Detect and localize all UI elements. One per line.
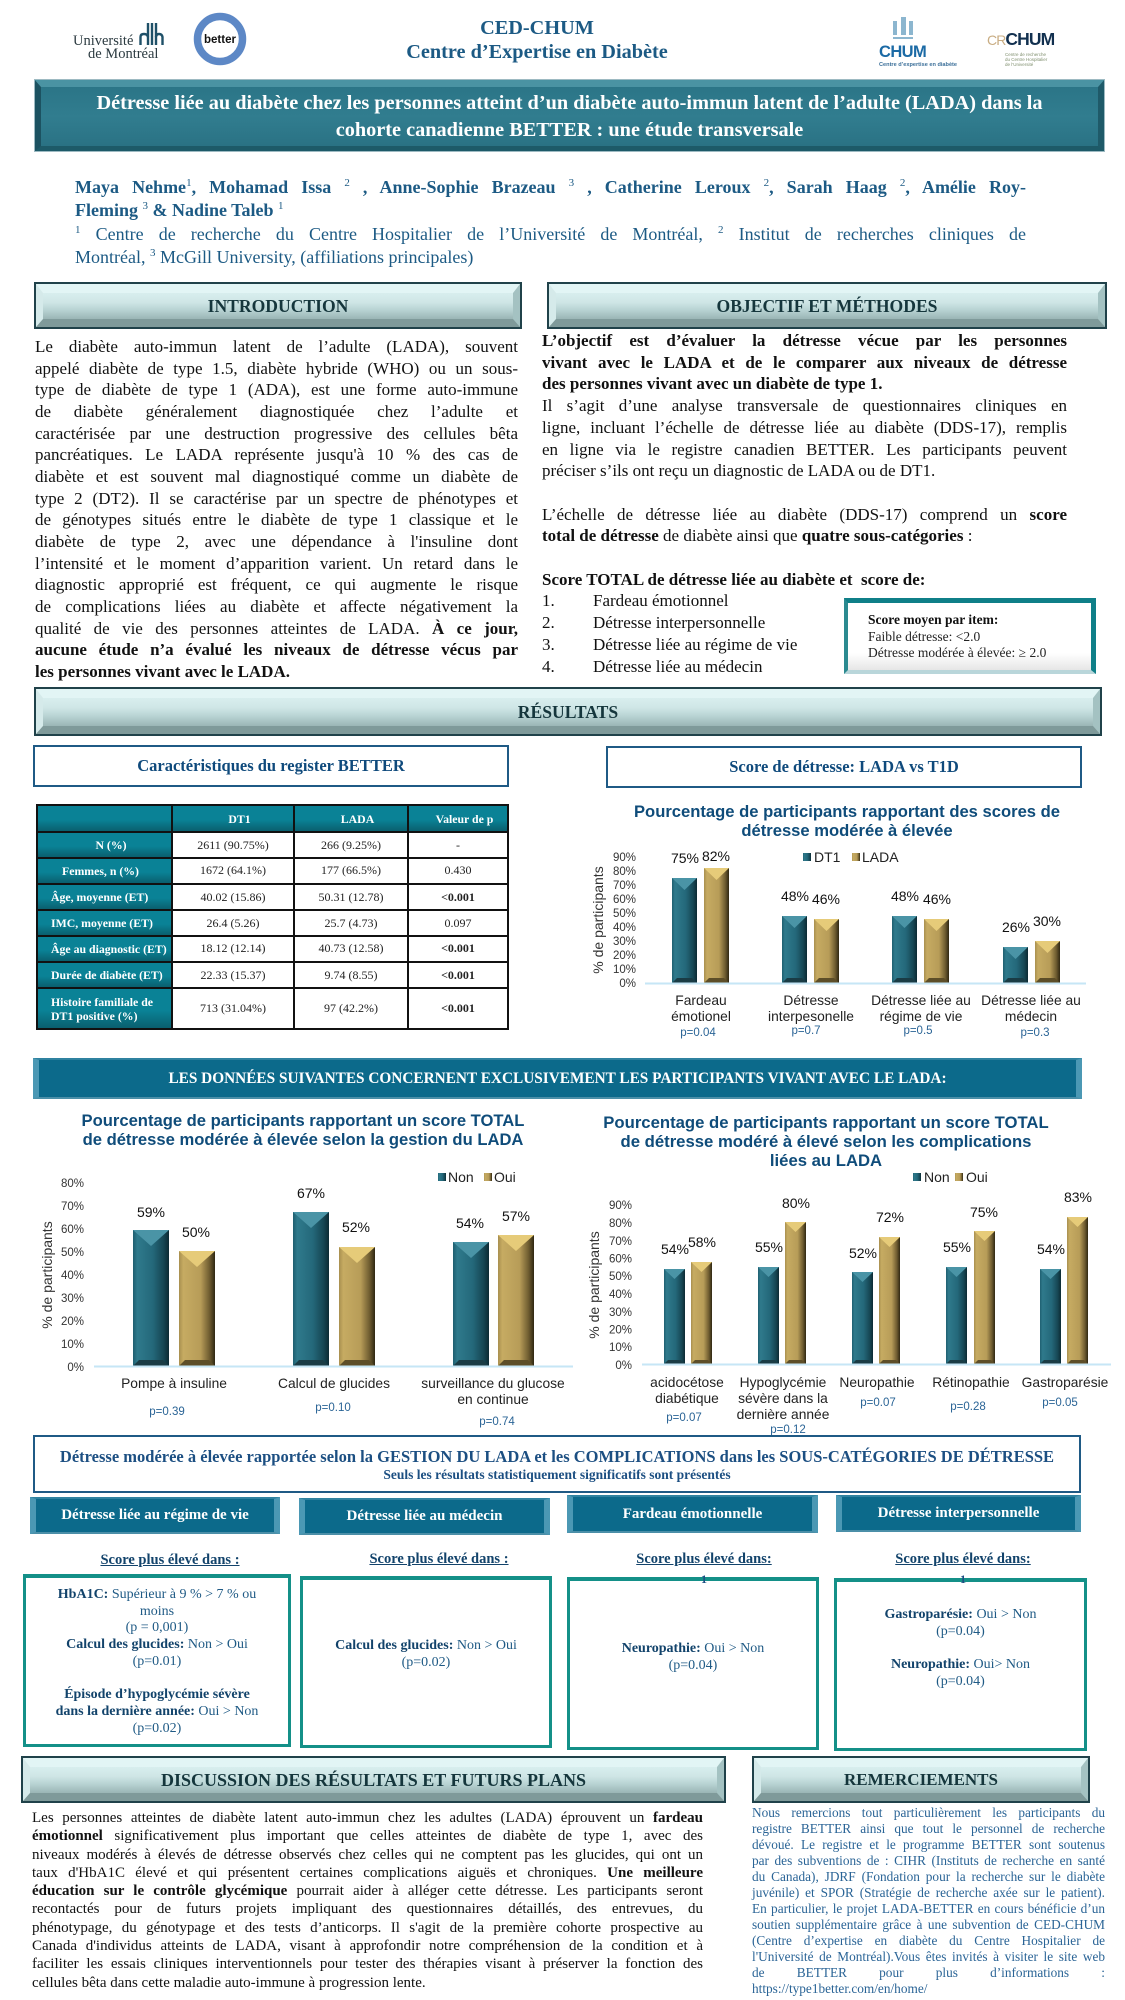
category labels: Hypoglycémie bbox=[740, 1375, 827, 1390]
text: discussion: niveaux modérés à élevés de détresse observés chez celles qui ne comptent pas les glucides, qui ont un bbox=[32, 1847, 703, 1863]
value labels: 58% bbox=[688, 1234, 716, 1250]
table: caractéristiques du registre: Durée de diabète (ET) bbox=[51, 968, 163, 982]
bars bbox=[645, 868, 1086, 984]
header: CED-CHUM: CED-CHUM bbox=[480, 17, 594, 39]
panel: résultats régime de vie bbox=[23, 1574, 291, 1747]
table: caractéristiques du registre: <0.001 bbox=[441, 1001, 475, 1015]
table: caractéristiques du registre: IMC, moyenne (ET) bbox=[51, 916, 153, 930]
table: caractéristiques du registre: Valeur de p bbox=[436, 812, 493, 826]
logo: Université de Montréal bbox=[73, 23, 164, 62]
table: caractéristiques du registre: <0.001 bbox=[441, 890, 475, 904]
legend bbox=[803, 849, 899, 865]
value labels: 75% bbox=[671, 850, 699, 866]
table: caractéristiques du registre: Histoire familiale de bbox=[51, 995, 153, 1009]
text: discussion: Canada d'individus atteints de LADA, visant à approfondir notre compréhension de la condition et à bbox=[32, 1938, 703, 1954]
panel: résultats fardeau émotionnelle: Neuropathie: Oui > Non bbox=[622, 1641, 764, 1656]
table: caractéristiques du registre: Âge au diagnostic (ET) bbox=[51, 942, 167, 956]
box note: Seuls les résultats statistiquement significatifs sont présentés bbox=[383, 1467, 731, 1482]
marker col 3: 1 bbox=[701, 1572, 707, 1586]
legend: Oui bbox=[966, 1169, 988, 1185]
bars bbox=[642, 1217, 1111, 1366]
text: objectif et méthodes: Détresse interpersonnelle bbox=[593, 613, 765, 632]
text: introduction: les personnes vivant avec le LADA. bbox=[35, 662, 290, 681]
y axis: 10% bbox=[613, 964, 636, 976]
table: caractéristiques du registre: <0.001 bbox=[441, 968, 475, 982]
p values: p=0.28 bbox=[950, 1401, 986, 1413]
category labels: médecin bbox=[1005, 1009, 1057, 1024]
subheading: score de détresse: Score de détresse: LADA vs T1D bbox=[729, 757, 959, 776]
legend: Non bbox=[448, 1169, 474, 1185]
logo: BETTER bbox=[194, 12, 246, 66]
value labels: 83% bbox=[1064, 1189, 1092, 1205]
y axis: % de participants bbox=[590, 866, 606, 974]
value labels: 50% bbox=[182, 1224, 210, 1240]
chart title: de détresse modéré à élevé selon les complications bbox=[621, 1132, 1031, 1151]
panel: résultats régime de vie: moins bbox=[140, 1604, 174, 1619]
category labels: interpesonelle bbox=[768, 1009, 854, 1024]
callout: score moyen par item: Score moyen par item: bbox=[868, 612, 998, 627]
p values: p=0.74 bbox=[479, 1416, 515, 1428]
text: introduction: diagnostic approprié est fréquent, ce qui augmente le risque bbox=[35, 575, 518, 594]
category labels: acidocétose bbox=[650, 1375, 724, 1390]
chart title bbox=[634, 802, 1060, 840]
logo: CHUM bbox=[879, 17, 957, 68]
legend: Non bbox=[924, 1169, 950, 1185]
p values: p=0.04 bbox=[680, 1027, 716, 1039]
table: caractéristiques du registre: 22.33 (15.37) bbox=[200, 968, 266, 982]
text: discussion bbox=[32, 1810, 703, 1991]
y axis: 30% bbox=[61, 1293, 84, 1305]
panel: résultats interpersonnelle: (p=0.04) bbox=[936, 1674, 985, 1689]
value labels: 46% bbox=[812, 891, 840, 907]
text: introduction: aucune étude n’a évalué les niveaux de détresse vécus par bbox=[35, 640, 518, 659]
authors and affiliations: Fleming 3 & Nadine Taleb 1 bbox=[75, 200, 284, 220]
category labels: Détresse liée au bbox=[871, 993, 971, 1008]
value labels: 67% bbox=[297, 1185, 325, 1201]
value labels: 57% bbox=[502, 1208, 530, 1224]
text: objectif et méthodes: Détresse liée au médecin bbox=[593, 657, 762, 676]
value labels: 54% bbox=[661, 1241, 689, 1257]
box heading: Détresse modérée à élevée rapportée selon la GESTION DU LADA et les COMPLICATIONS dans les SOUS-CATÉGORIES DE DÉTRESSE bbox=[60, 1447, 1054, 1466]
panel: résultats régime de vie: HbA1C: Supérieur à 9 % > 7 % ou bbox=[58, 1587, 256, 1602]
y axis bbox=[586, 1200, 632, 1372]
table: caractéristiques du registre: 18.12 (12.14) bbox=[200, 941, 266, 955]
text: remerciements: En particulier, le projet LADA-BETTER en cours bénéficie d’un bbox=[752, 1901, 1105, 1916]
authors and affiliations: Maya Nehme1, Mohamad Issa 2 , Anne-Sophie Brazeau 3 , Catherine Leroux 2, Sarah Haag 2, Amélie Roy- bbox=[75, 177, 1026, 197]
text: remerciements: registre BETTER ainsi que tout le personnel de recherche bbox=[752, 1821, 1105, 1836]
table: caractéristiques du registre: Âge, moyenne (ET) bbox=[51, 890, 148, 904]
legend bbox=[913, 1169, 988, 1185]
y axis: 10% bbox=[609, 1342, 632, 1354]
logo: CRCHUM bbox=[987, 29, 1054, 67]
value labels: 82% bbox=[702, 848, 730, 864]
value labels bbox=[661, 1189, 1092, 1261]
text: objectif et méthodes: préciser s’ils ont reçu un diagnostic de LADA ou de DT1. bbox=[542, 461, 935, 480]
p values: p=0.10 bbox=[315, 1402, 351, 1414]
value labels: 48% bbox=[781, 888, 809, 904]
category labels bbox=[671, 993, 1081, 1024]
text: remerciements: du Canada), JDRF (Fondation pour la recherche sur le diabète bbox=[752, 1869, 1105, 1884]
table: caractéristiques du registre: 40.73 (12.58) bbox=[318, 941, 384, 955]
p values: p=0.5 bbox=[903, 1025, 933, 1037]
table: caractéristiques du registre: 2611 (90.75%) bbox=[197, 838, 269, 852]
authors and affiliations: Montréal, 3 McGill University, (affiliations principales) bbox=[75, 247, 473, 267]
subheading: caractéristiques bbox=[33, 745, 509, 787]
title banner: cohorte canadienne BETTER : une étude transversale bbox=[336, 119, 803, 141]
logo: BETTER: better bbox=[204, 34, 236, 46]
y axis: 60% bbox=[609, 1254, 632, 1266]
p values: p=0.12 bbox=[770, 1424, 806, 1436]
y axis: 90% bbox=[609, 1200, 632, 1212]
subheading: score col 2: Score plus élevé dans : bbox=[369, 1551, 509, 1567]
value labels: 52% bbox=[849, 1245, 877, 1261]
text: introduction: Le diabète auto-immun latent de l’adulte (LADA), souvent bbox=[35, 337, 518, 356]
y axis: 70% bbox=[61, 1201, 84, 1213]
value labels: 54% bbox=[456, 1215, 484, 1231]
y axis: 50% bbox=[613, 908, 636, 920]
y axis: 40% bbox=[613, 922, 636, 934]
panel: résultats régime de vie: Calcul des glucides: Non > Oui bbox=[66, 1637, 248, 1652]
text: discussion: faciliter les essais cliniques interventionnels pour tester des thérapies visant à préserver la fonction des bbox=[32, 1956, 703, 1972]
text: introduction: pancréatiques. Le LADA représente jusqu'à 10 % des cas de bbox=[35, 445, 518, 464]
chart: scores LADA vs DT1 bbox=[590, 802, 1086, 1039]
heading: introduction bbox=[36, 284, 520, 327]
header: CED-CHUM bbox=[406, 17, 668, 63]
subheading: score col 1: Score plus élevé dans : bbox=[100, 1552, 240, 1568]
y axis bbox=[39, 1178, 84, 1374]
text: remerciements bbox=[752, 1805, 1105, 1996]
chart: gestion du LADA bbox=[39, 1111, 573, 1428]
text: objectif et méthodes: ligne, incluant l’échelle de détresse liée au diabète (DDS-17), remplis bbox=[542, 418, 1067, 437]
text: objectif et méthodes bbox=[542, 331, 1067, 676]
category labels: en continue bbox=[457, 1392, 529, 1407]
panel: résultats médecin: (p=0.02) bbox=[402, 1655, 450, 1670]
logo: CRCHUM: de l’Université bbox=[1005, 62, 1033, 67]
tab: fardeau émotionnelle bbox=[567, 1495, 818, 1533]
p values: p=0.39 bbox=[149, 1406, 185, 1418]
y axis: 0% bbox=[615, 1360, 632, 1372]
category labels: Détresse liée au bbox=[981, 993, 1081, 1008]
value labels: 54% bbox=[1037, 1241, 1065, 1257]
table: caractéristiques du registre: - bbox=[456, 838, 460, 852]
heading: introduction: INTRODUCTION bbox=[208, 296, 348, 316]
category labels: émotionel bbox=[671, 1009, 731, 1024]
table: caractéristiques du registre: 1672 (64.1%) bbox=[200, 863, 266, 877]
heading: discussion: DISCUSSION DES RÉSULTATS ET FUTURS PLANS bbox=[161, 1770, 586, 1790]
y axis: 50% bbox=[609, 1271, 632, 1283]
bars bbox=[94, 1212, 573, 1368]
y axis: 40% bbox=[61, 1270, 84, 1282]
text: objectif et méthodes: Il s’agit d’une analyse transversale de questionnaires cliniques en bbox=[542, 396, 1067, 415]
category labels: Détresse bbox=[783, 993, 839, 1008]
text: remerciements: de BETTER pour plus d’informations : bbox=[752, 1965, 1105, 1980]
y axis: 50% bbox=[61, 1247, 84, 1259]
y axis: % de participants bbox=[586, 1231, 602, 1339]
subheading: caractéristiques: Caractéristiques du register BETTER bbox=[137, 756, 405, 775]
legend: Oui bbox=[494, 1169, 516, 1185]
table: caractéristiques du registre: 9.74 (8.55) bbox=[324, 968, 378, 982]
subheading: score col 4: Score plus élevé dans: bbox=[895, 1551, 1031, 1567]
chart title: Pourcentage de participants rapportant un score TOTAL bbox=[82, 1111, 524, 1130]
p values: p=0.05 bbox=[1042, 1397, 1078, 1409]
category labels: Gastroparésie bbox=[1022, 1375, 1109, 1390]
chart title: détresse modérée à élevée bbox=[741, 821, 953, 840]
text: remerciements: Nous remercions tout particulièrement les participants du bbox=[752, 1805, 1105, 1820]
chart title bbox=[603, 1113, 1049, 1170]
panel: résultats interpersonnelle: Neuropathie: Oui> Non bbox=[891, 1657, 1030, 1672]
authors and affiliations bbox=[75, 177, 1026, 267]
legend: DT1 bbox=[814, 849, 841, 865]
heading: résultats bbox=[36, 689, 1100, 734]
panel: résultats régime de vie: (p = 0,001) bbox=[126, 1620, 188, 1635]
chart title: Pourcentage de participants rapportant un score TOTAL bbox=[603, 1113, 1049, 1132]
text: discussion: Les personnes atteintes de diabète latent auto-immun chez les adultes (LADA) éprouvent un fardeau bbox=[32, 1810, 703, 1826]
logo: CRCHUM: CRCHUM bbox=[987, 29, 1054, 49]
p values: p=0.07 bbox=[666, 1412, 702, 1424]
p values bbox=[666, 1397, 1078, 1436]
text: discussion: cellules bêta dans cette maladie auto-immune à progression lente. bbox=[32, 1975, 426, 1991]
text: objectif et méthodes: 4. bbox=[542, 657, 555, 676]
panel: résultats médecin bbox=[300, 1576, 552, 1748]
header: CED-CHUM: Centre d’Expertise en Diabète bbox=[406, 41, 668, 63]
text: remerciements: soutien supplémentaire grâce à une subvention de CED-CHUM bbox=[752, 1917, 1105, 1932]
text: remerciements: l'Université de Montréal).Vous êtes invités à visiter le site web bbox=[752, 1949, 1105, 1964]
chart title: liées au LADA bbox=[770, 1151, 882, 1170]
text: introduction: de complications liées au diabète et affecte négativement la bbox=[35, 597, 518, 616]
text: objectif et méthodes: 2. bbox=[542, 613, 555, 632]
logo: CRCHUM: Centre de recherche bbox=[1005, 52, 1046, 57]
text: objectif et méthodes: total de détresse de diabète ainsi que quatre sous-catégories : bbox=[542, 526, 972, 545]
category labels: Pompe à insuline bbox=[121, 1376, 227, 1391]
text: discussion: recontactés pour de futurs projets impliquant des questionnaires détaillés, des entrevues, du bbox=[32, 1901, 703, 1917]
y axis: 70% bbox=[613, 880, 636, 892]
chart title: de détresse modérée à élevée selon la gestion du LADA bbox=[83, 1130, 523, 1149]
table: caractéristiques du registre: 97 (42.2%) bbox=[324, 1001, 378, 1015]
category labels: sévère dans la bbox=[738, 1391, 828, 1406]
table: caractéristiques du registre: 0.430 bbox=[444, 863, 472, 877]
p values: p=0.07 bbox=[860, 1397, 896, 1409]
text: introduction: l’intensité et le moment d’apparition varient. Un retard dans le bbox=[35, 554, 518, 573]
heading: objectif et méthodes bbox=[549, 284, 1105, 327]
text: discussion: phénotypage, du génotypage et des tests d’anticorps. Il s'agit de la première cohorte prospective au bbox=[32, 1920, 703, 1936]
table: caractéristiques du registre: 0.097 bbox=[444, 916, 472, 930]
tab: régime de vie: Détresse liée au régime de vie bbox=[61, 1507, 249, 1523]
value labels: 55% bbox=[943, 1239, 971, 1255]
text: objectif et méthodes: en ligne via le registre canadien BETTER. Les participants peuvent bbox=[542, 440, 1067, 459]
heading: remerciements: REMERCIEMENTS bbox=[844, 1770, 998, 1789]
table: caractéristiques du registre: 25.7 (4.73) bbox=[324, 916, 378, 930]
callout: score moyen par item: Détresse modérée à élevée: ≥ 2.0 bbox=[868, 645, 1046, 660]
value labels: 46% bbox=[923, 891, 951, 907]
panel: résultats fardeau émotionnelle: (p=0.04) bbox=[669, 1658, 717, 1673]
text: remerciements: (Centre d’expertise en diabète du Centre Hospitalier de bbox=[752, 1933, 1105, 1948]
text: remerciements: par des subventions de : CIHR (Instituts de recherche en santé bbox=[752, 1853, 1105, 1868]
text: introduction: diabète de type 2, avec une dépendance à l'insuline dont bbox=[35, 532, 518, 551]
value labels: 80% bbox=[782, 1195, 810, 1211]
heading: résultats: RÉSULTATS bbox=[518, 702, 618, 722]
p values: p=0.7 bbox=[791, 1025, 821, 1037]
value labels: 30% bbox=[1033, 913, 1061, 929]
authors and affiliations: 1 Centre de recherche du Centre Hospitalier de l’Université de Montréal, 2 Institut de recherches cliniques de bbox=[75, 224, 1026, 244]
y axis: 0% bbox=[67, 1362, 84, 1374]
text: introduction: diabète et est souvent mal diagnostiqué comme un diabète de bbox=[35, 467, 518, 486]
y axis: 80% bbox=[609, 1218, 632, 1230]
table: caractéristiques du registre: <0.001 bbox=[441, 941, 475, 955]
p values bbox=[149, 1402, 515, 1428]
value labels: 48% bbox=[891, 888, 919, 904]
heading: objectif et méthodes: OBJECTIF ET MÉTHODES bbox=[717, 296, 937, 316]
text: discussion: émotionnel significativement plus important que celles atteintes de diabète de type 1, avec des bbox=[32, 1828, 703, 1844]
text: objectif et méthodes: Score TOTAL de détresse liée au diabète et score de: bbox=[542, 570, 925, 589]
table: caractéristiques du registre: Femmes, n (%) bbox=[62, 864, 139, 878]
panel: résultats interpersonnelle bbox=[834, 1578, 1087, 1751]
tab: fardeau émotionnelle: Fardeau émotionnelle bbox=[623, 1506, 762, 1522]
value labels: 75% bbox=[970, 1204, 998, 1220]
y axis: % de participants bbox=[39, 1221, 55, 1329]
title banner bbox=[34, 79, 1105, 152]
value labels: 59% bbox=[137, 1204, 165, 1220]
category labels: surveillance du glucose bbox=[421, 1376, 565, 1391]
y axis: 30% bbox=[609, 1307, 632, 1319]
text: objectif et méthodes: Détresse liée au régime de vie bbox=[593, 635, 797, 654]
y axis: 30% bbox=[613, 936, 636, 948]
value labels: 72% bbox=[876, 1209, 904, 1225]
y axis: 80% bbox=[613, 866, 636, 878]
y axis: 60% bbox=[61, 1224, 84, 1236]
legend bbox=[438, 1169, 516, 1185]
title banner: Détresse liée au diabète chez les personnes atteint d’un diabète auto-immun latent de l’adulte (LADA) dans la bbox=[96, 92, 1043, 114]
subheading: score de détresse bbox=[606, 746, 1082, 788]
p values bbox=[680, 1025, 1050, 1039]
text: objectif et méthodes: des personnes vivant avec un diabète de type 1. bbox=[542, 374, 882, 393]
table: caractéristiques du registre: 177 (66.5%) bbox=[321, 863, 381, 877]
text: objectif et méthodes: vivant avec le LADA et de le comparer aux niveaux de détresse bbox=[542, 353, 1067, 372]
chart title bbox=[82, 1111, 524, 1149]
y axis: 70% bbox=[609, 1236, 632, 1248]
text: objectif et méthodes: L’échelle de détresse liée au diabète (DDS-17) comprend un score bbox=[542, 505, 1067, 524]
legend: LADA bbox=[862, 849, 899, 865]
banner: données LADA bbox=[33, 1058, 1082, 1099]
y axis: 90% bbox=[613, 852, 636, 864]
text: introduction: type de diabète de type 1 (ADA), est une forme auto-immune bbox=[35, 380, 518, 399]
table: caractéristiques du registre: LADA bbox=[341, 812, 374, 826]
marker col 4: 1 bbox=[960, 1572, 966, 1586]
logo: CHUM: CHUM bbox=[879, 43, 926, 61]
panel: résultats régime de vie: Épisode d’hypoglycémie sévère bbox=[64, 1687, 250, 1702]
y axis: 40% bbox=[609, 1289, 632, 1301]
text: introduction: de génotypes situés entre le diabète de type 1 classique et le bbox=[35, 510, 518, 529]
table: caractéristiques du registre: DT1 positive (%) bbox=[51, 1009, 138, 1023]
tab: interpersonnelle: Détresse interpersonnelle bbox=[878, 1505, 1039, 1521]
callout: score moyen par item bbox=[844, 598, 1096, 674]
table: caractéristiques du registre: 40.02 (15.86) bbox=[200, 890, 266, 904]
heading: remerciements bbox=[754, 1758, 1088, 1801]
chart: complications du LADA bbox=[586, 1113, 1111, 1436]
table: caractéristiques du registre: 26.4 (5.26) bbox=[206, 916, 260, 930]
table: caractéristiques du registre bbox=[36, 804, 509, 1030]
text: objectif et méthodes: 3. bbox=[542, 635, 555, 654]
panel: résultats fardeau émotionnelle bbox=[567, 1577, 819, 1750]
text: introduction: caractérisée par une destruction progressive des cellules bêta bbox=[35, 424, 518, 443]
text: objectif et méthodes: 1. bbox=[542, 591, 555, 610]
logo: CRCHUM: du Centre Hospitalier bbox=[1005, 57, 1047, 62]
p values: p=0.3 bbox=[1020, 1027, 1050, 1039]
category labels: Calcul de glucides bbox=[278, 1376, 390, 1391]
category labels: Rétinopathie bbox=[932, 1375, 1010, 1390]
y axis: 0% bbox=[619, 978, 636, 990]
panel: résultats interpersonnelle: Gastroparésie: Oui > Non bbox=[885, 1607, 1036, 1622]
callout: score moyen par item: Faible détresse: <2.0 bbox=[868, 628, 980, 644]
panel: résultats régime de vie: (p=0.02) bbox=[133, 1721, 181, 1736]
text: introduction: type 2 (DT2). Il se caractérise par un spectre de phénotypes et bbox=[35, 489, 518, 508]
banner: données LADA: LES DONNÉES SUIVANTES CONCERNENT EXCLUSIVEMENT LES PARTICIPANTS VIVANT AVEC LE LADA: bbox=[168, 1070, 947, 1086]
category labels: diabétique bbox=[655, 1391, 719, 1406]
chart title: Pourcentage de participants rapportant des scores de bbox=[634, 802, 1060, 821]
text: objectif et méthodes: Fardeau émotionnel bbox=[593, 591, 728, 610]
text: introduction: appelé diabète de type 1.5, diabète hybride (WHO) ou un sous- bbox=[35, 359, 518, 378]
tab: interpersonnelle bbox=[836, 1495, 1081, 1532]
text: discussion: taux d'HbA1C élevé et qui présentent certaines complications aiguës et chroniques. Une meilleure bbox=[32, 1865, 703, 1881]
text: objectif et méthodes: L’objectif est d’évaluer la détresse vécue par les personnes bbox=[542, 331, 1067, 350]
text: introduction: qualité de vie des personnes atteintes de LADA. À ce jour, bbox=[35, 619, 518, 638]
heading: discussion bbox=[23, 1758, 724, 1801]
y axis: 60% bbox=[613, 894, 636, 906]
panel: résultats médecin: Calcul des glucides: Non > Oui bbox=[335, 1638, 517, 1653]
category labels: dernière année bbox=[737, 1407, 830, 1422]
text: discussion: éducation sur le contrôle glycémique pourrait aider à alléger cette détresse. Les participants seront bbox=[32, 1883, 703, 1899]
category labels: régime de vie bbox=[880, 1009, 963, 1024]
text: remerciements: https://type1better.com/en/home/ bbox=[752, 1981, 927, 1996]
tab: médecin bbox=[299, 1498, 550, 1535]
table: caractéristiques du registre: 713 (31.04%) bbox=[200, 1001, 266, 1015]
y axis: 80% bbox=[61, 1178, 84, 1190]
table: caractéristiques du registre: N (%) bbox=[95, 838, 127, 852]
category labels bbox=[650, 1375, 1109, 1422]
text: introduction: de diabète généralement diagnostiquée chez l’adulte et bbox=[35, 402, 518, 421]
panel: résultats régime de vie: (p=0.01) bbox=[133, 1654, 181, 1669]
category labels: Neuropathie bbox=[839, 1375, 915, 1390]
panel: résultats régime de vie: dans la dernière année: Oui > Non bbox=[56, 1704, 258, 1719]
table: caractéristiques du registre: 266 (9.25%) bbox=[321, 838, 381, 852]
text: introduction bbox=[35, 337, 518, 681]
logo: Université de Montréal: Université bbox=[73, 33, 133, 49]
y axis: 20% bbox=[609, 1324, 632, 1336]
y axis bbox=[590, 852, 636, 990]
subheading: score col 3: Score plus élevé dans: bbox=[636, 1551, 772, 1567]
category labels: Fardeau bbox=[675, 993, 727, 1008]
panel: résultats interpersonnelle: (p=0.04) bbox=[936, 1624, 985, 1639]
y axis: 20% bbox=[613, 950, 636, 962]
y axis: 10% bbox=[61, 1339, 84, 1351]
value labels bbox=[137, 1185, 530, 1240]
category labels bbox=[121, 1376, 565, 1407]
text: remerciements: juvénile) et SPOR (Stratégie de recherche axée sur le patient). bbox=[752, 1885, 1105, 1900]
table: caractéristiques du registre: DT1 bbox=[228, 812, 251, 826]
box: détresse par sous-catégories bbox=[33, 1435, 1081, 1493]
value labels bbox=[671, 848, 1061, 935]
value labels: 52% bbox=[342, 1219, 370, 1235]
value labels: 55% bbox=[755, 1239, 783, 1255]
table: caractéristiques du registre: 50.31 (12.78) bbox=[318, 890, 384, 904]
text: remerciements: dévoué. Le registre et le programme BETTER sont soutenus bbox=[752, 1837, 1105, 1852]
logo: CHUM: Centre d’expertise en diabète bbox=[879, 62, 957, 68]
logo: Université de Montréal: de Montréal bbox=[88, 46, 158, 62]
tab: régime de vie bbox=[30, 1497, 280, 1534]
value labels: 26% bbox=[1002, 919, 1030, 935]
tab: médecin: Détresse liée au médecin bbox=[347, 1508, 502, 1524]
y axis: 20% bbox=[61, 1316, 84, 1328]
